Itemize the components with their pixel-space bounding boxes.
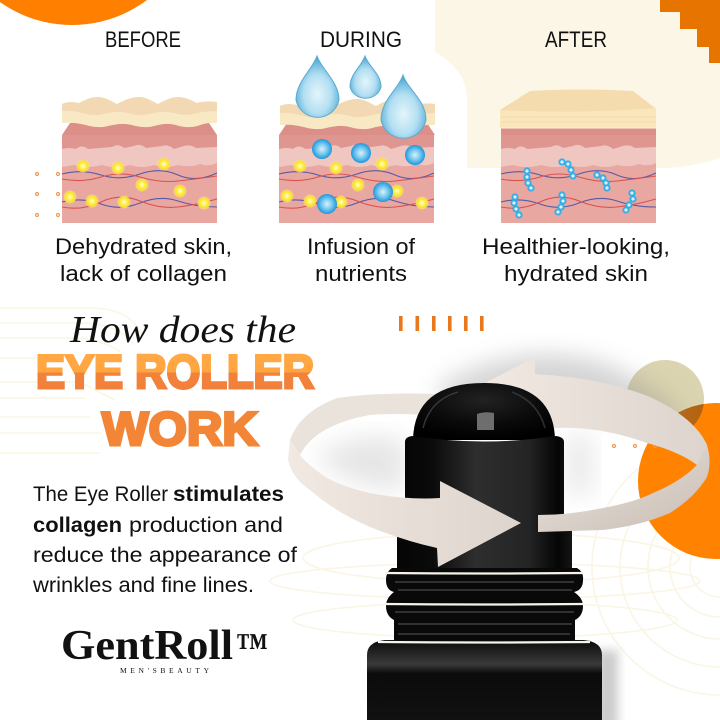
soft shadows: [315, 355, 690, 720]
caption: after: [482, 234, 670, 286]
logo: MEN'SBEAUTY: [120, 666, 211, 675]
body text: wrinkles and fine lines.: [32, 574, 254, 597]
orange circle top left: [0, 0, 197, 25]
skin illustration: during: [279, 56, 435, 223]
orange dashes: [399, 316, 484, 331]
arrow: rear band: [290, 357, 707, 465]
tan circle: [626, 360, 704, 438]
body text: The Eye Roller: [33, 483, 168, 506]
decorative rings right: [270, 439, 720, 695]
caption: before: lack of collagen: [60, 261, 227, 286]
roller ball: [413, 383, 555, 440]
caption: during: nutrients: [315, 261, 407, 286]
caption: during: Infusion of: [307, 234, 416, 259]
body text: production and: [129, 514, 283, 537]
bottle base: [367, 640, 602, 720]
icon: water drops: [296, 56, 426, 138]
decorative line art left: [0, 308, 142, 453]
caption: after: Healthier-looking,: [482, 234, 670, 259]
collagen chains: [511, 159, 636, 218]
orange stair corner: [660, 0, 720, 63]
body text: stimulates: [173, 483, 284, 506]
circle overlap: [678, 404, 704, 426]
orange circle right: [638, 403, 720, 559]
title: work: WORK: [102, 402, 258, 455]
body text: reduce the appearance of: [33, 544, 297, 567]
body text: [32, 483, 297, 597]
caption: after: hydrated skin: [504, 261, 648, 286]
skin illustration: before: [62, 97, 217, 223]
caption: before: [55, 234, 232, 286]
arrow: front band with head: [288, 440, 710, 567]
heading: during: DURING: [320, 27, 402, 52]
bottle neck: [397, 436, 572, 570]
body text: collagen: [33, 514, 122, 537]
product: roller bottle: [367, 383, 602, 720]
title: eye roller: EYE ROLLER: [36, 345, 314, 398]
decorative dots right: [612, 444, 656, 448]
cream background shape: [435, 0, 720, 168]
threads: [386, 568, 583, 642]
caption: during: [307, 234, 416, 286]
logo: GentRoll: [61, 623, 233, 669]
logo: ™: [236, 626, 268, 668]
heading: before: BEFORE: [105, 27, 181, 52]
logo: [61, 623, 268, 675]
decorative dots left: [36, 172, 60, 216]
title: how does the: How does the: [69, 309, 296, 351]
white rings: [378, 573, 590, 642]
heading: after: AFTER: [545, 27, 607, 52]
skin illustration: after: [500, 90, 656, 223]
caption: before: Dehydrated skin,: [55, 234, 232, 259]
